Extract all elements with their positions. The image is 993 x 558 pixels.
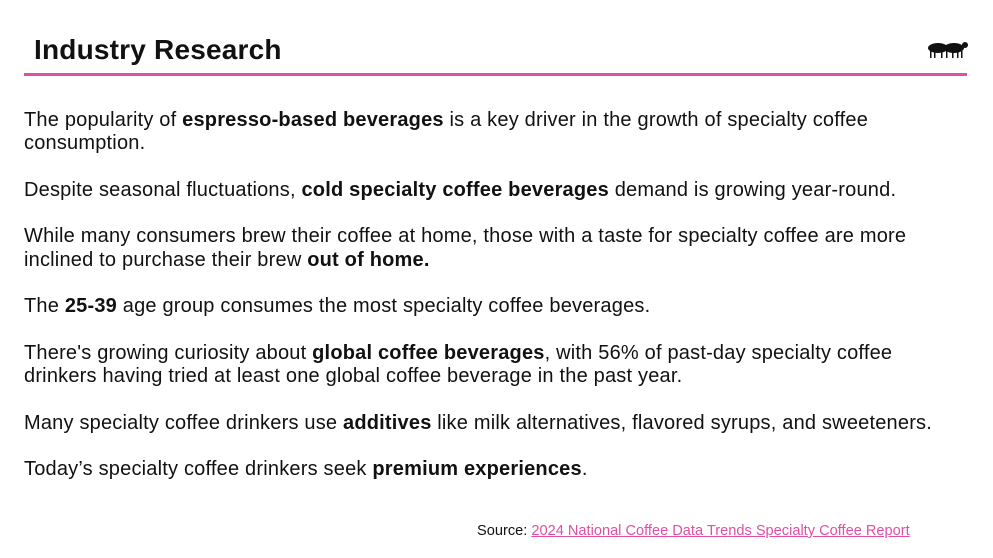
text block: findings: Today’s specialty coffee drinkers seek premium experiences. [24,458,588,480]
title: Industry Research [34,34,282,65]
icon: sheep logo [928,42,968,58]
text block: findings: There's growing curiosity about global coffee beverages, with 56% of past-day specialty coffee [24,342,892,364]
text block: findings: The 25-39 age group consumes the most specialty coffee beverages. [24,295,650,317]
text block: findings [24,109,932,480]
text block: findings: The popularity of espresso-based beverages is a key driver in the growth of specialty coffee [24,109,868,131]
text block: findings: While many consumers brew their coffee at home, those with a taste for specialty coffee are more [24,225,906,247]
text block: findings: consumption. [24,132,145,154]
source: Source: 2024 National Coffee Data Trends Specialty Coffee Report [477,523,910,539]
text block: findings: drinkers having tried at least one global coffee beverage in the past year. [24,365,682,387]
text block: findings: inclined to purchase their brew out of home. [24,249,430,271]
text block: findings: Many specialty coffee drinkers use additives like milk alternatives, flavored syrups, and sweeteners. [24,412,932,434]
text block: findings: Despite seasonal fluctuations, cold specialty coffee beverages demand is growing year-round. [24,179,896,201]
pink rule [24,73,967,76]
